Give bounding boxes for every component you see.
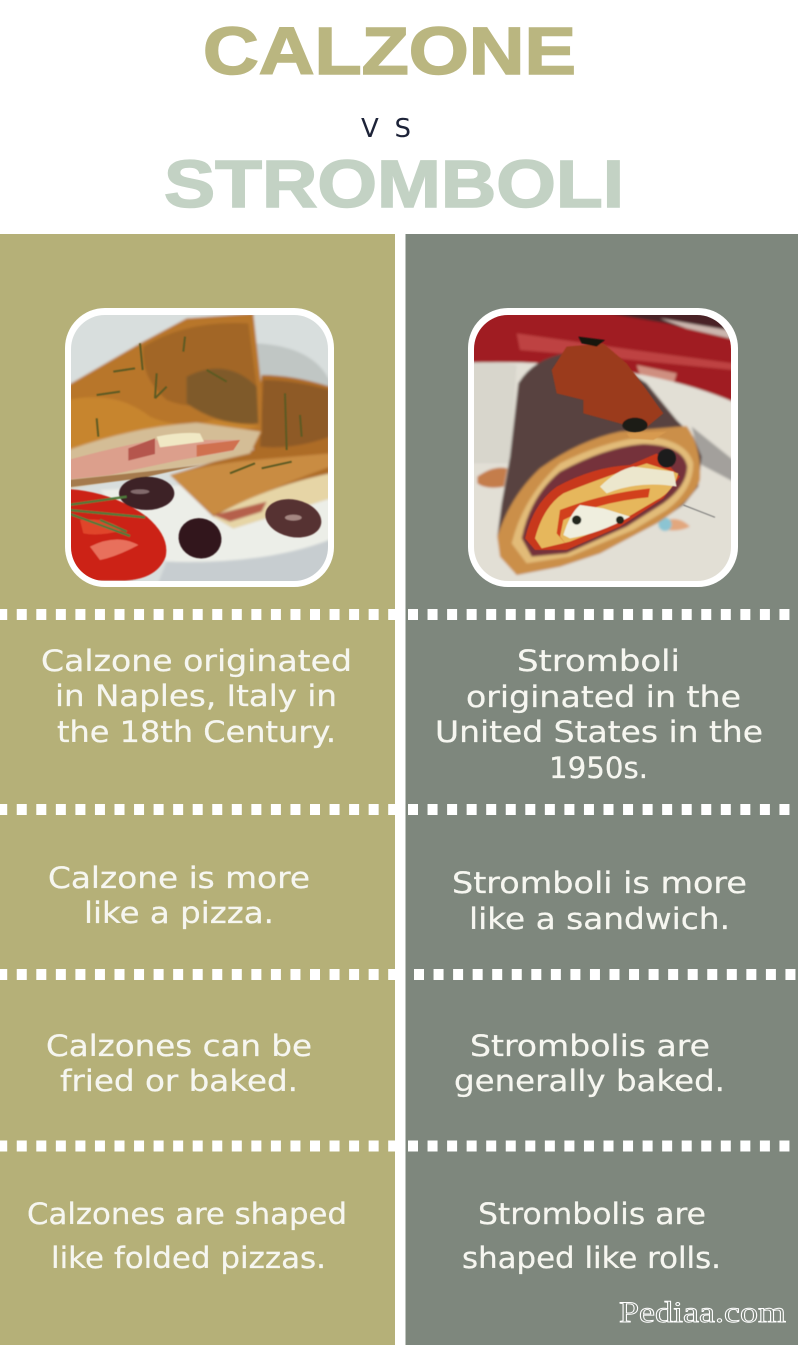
text: calzone origin: Calzone originated [41, 644, 352, 678]
text: stromboli sandwich: Stromboli is more [452, 866, 747, 900]
text: stromboli origin: Stromboli [517, 644, 680, 678]
photo frame: calzone [63, 307, 337, 590]
title: Calzone: CALZONE [203, 14, 576, 89]
text: calzone shape: like folded pizzas. [51, 1241, 326, 1275]
text: calzone pizza: like a pizza. [84, 896, 274, 930]
title: vs: V S [361, 114, 411, 144]
text: stromboli shape: shaped like rolls. [462, 1241, 721, 1275]
text: stromboli cooking [454, 1029, 725, 1098]
text: calzone origin [41, 644, 352, 749]
text: calzone pizza [48, 861, 310, 930]
title: Stromboli: STROMBOLI [164, 147, 624, 222]
text: stromboli sandwich [452, 866, 747, 936]
text: stromboli cooking: Strombolis are [470, 1029, 710, 1063]
text: calzone origin: the 18th Century. [57, 715, 336, 749]
text: calzone shape [27, 1197, 347, 1275]
text: calzone cooking [46, 1029, 312, 1098]
dotted dividers [0, 614, 798, 1146]
text: stromboli origin: 1950s. [549, 751, 648, 785]
text: calzone pizza: Calzone is more [48, 861, 310, 895]
panel: calzone column [0, 234, 395, 1345]
text: stromboli shape: Strombolis are [478, 1197, 706, 1231]
text: calzone cooking: Calzones can be [46, 1029, 312, 1063]
text: stromboli shape [462, 1197, 721, 1275]
panel: stromboli column [406, 234, 798, 1345]
text: stromboli cooking: generally baked. [454, 1064, 725, 1098]
text: calzone shape: Calzones are shaped [27, 1197, 347, 1231]
logo: Pediaa.com: Pediaa.com [619, 1296, 786, 1329]
text: calzone cooking: fried or baked. [60, 1064, 298, 1098]
text: stromboli sandwich: like a sandwich. [469, 902, 730, 936]
text: stromboli origin: United States in the [435, 715, 763, 749]
text: stromboli origin [435, 644, 763, 785]
text: calzone origin: in Naples, Italy in [55, 679, 337, 713]
text: stromboli origin: originated in the [466, 680, 741, 714]
photo frame: stromboli [468, 307, 738, 590]
